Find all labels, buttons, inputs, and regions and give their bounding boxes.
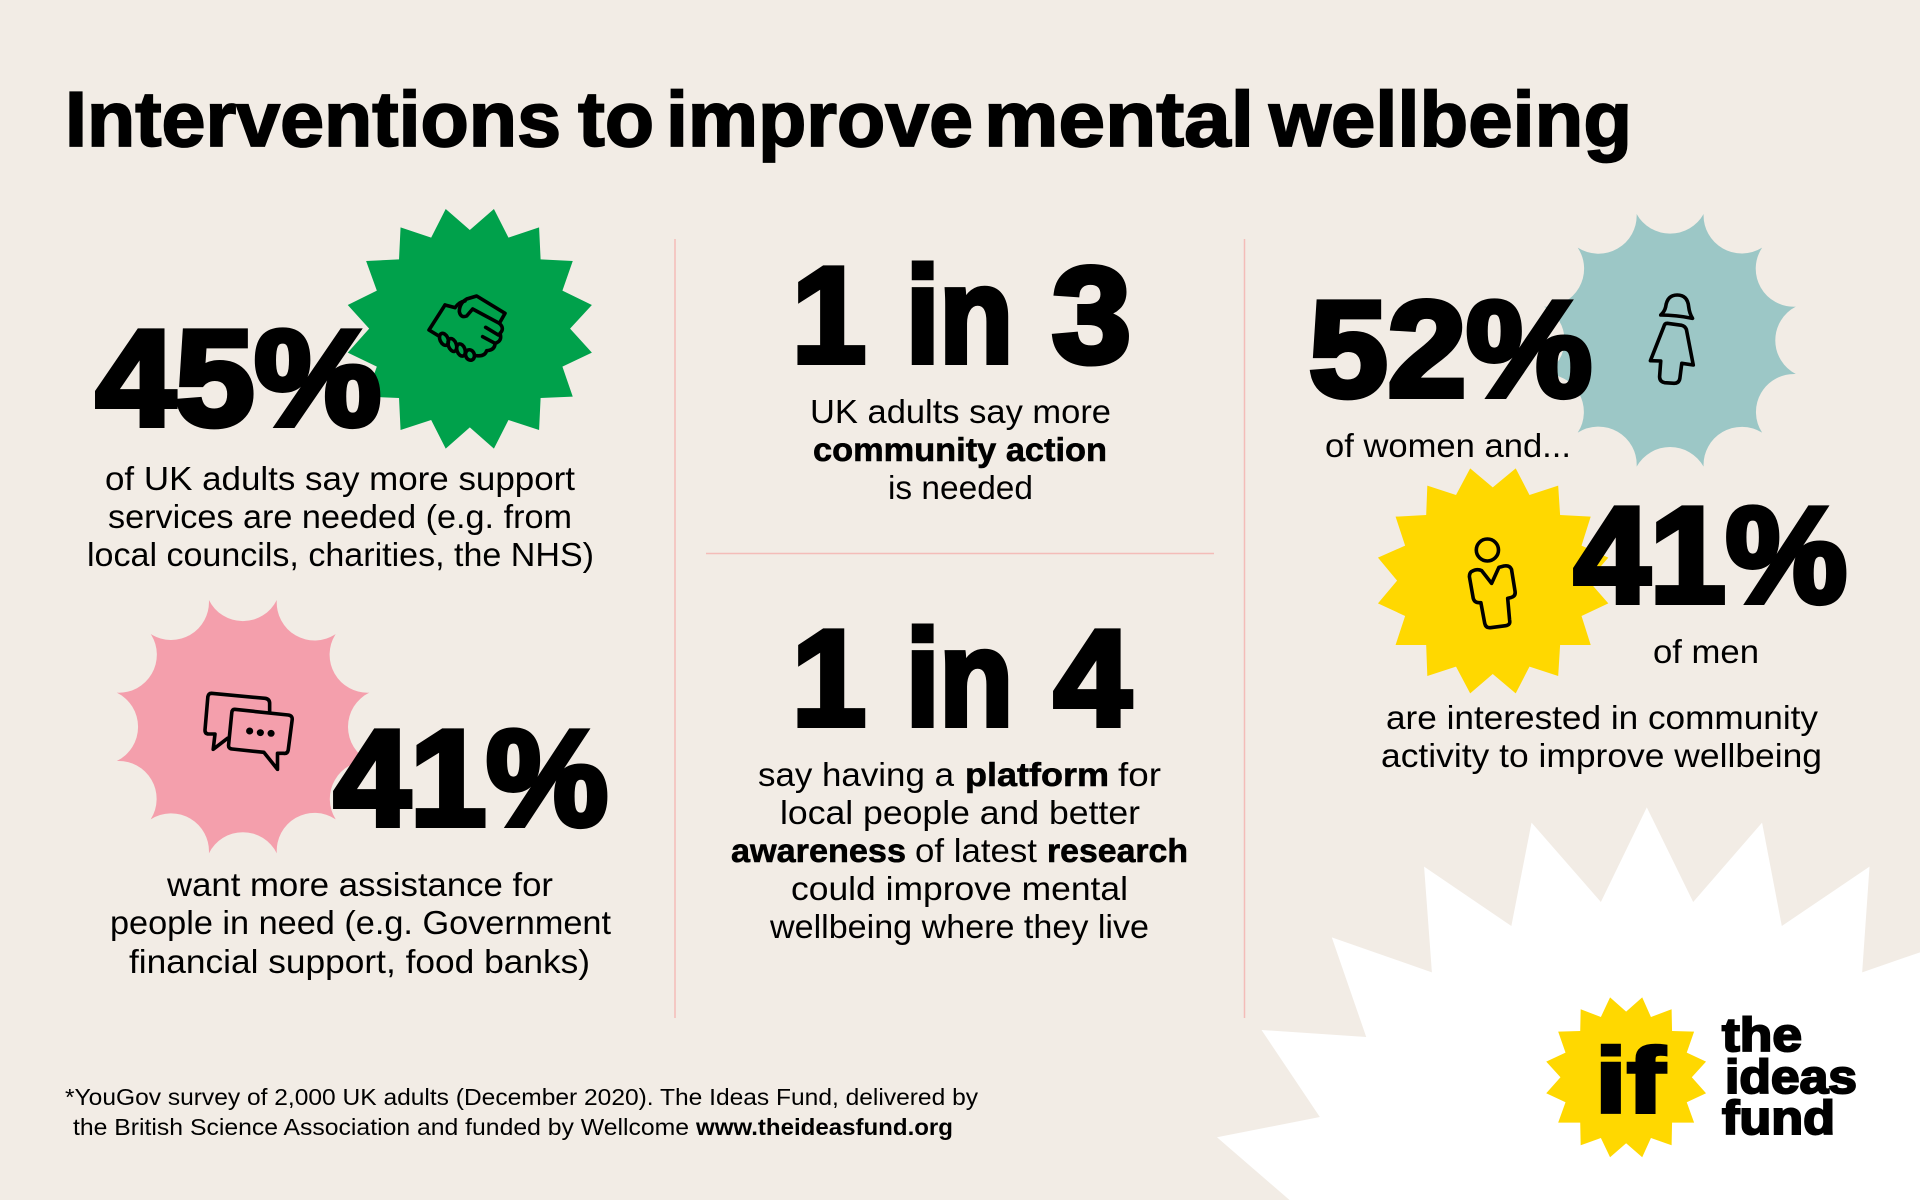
logo mark: if: if	[1595, 1030, 1665, 1132]
logo: the ideas fund	[1546, 997, 1857, 1157]
text: platform and research description: wellbeing where they live	[769, 908, 1149, 945]
panel: women and men	[1309, 214, 1847, 774]
logo wordmark	[1722, 1008, 1857, 1144]
text: platform and research description: research	[1047, 832, 1188, 869]
logo wordmark: the	[1722, 1008, 1802, 1061]
text: support services description: local councils, charities, the NHS)	[87, 536, 594, 573]
stat: 52%: 52%	[1309, 273, 1592, 425]
stat: 1 in 3: in	[906, 239, 1013, 391]
stat: 45%: 45%	[96, 302, 381, 454]
text: assistance description: want more assistance for	[166, 866, 553, 903]
logo wordmark: fund	[1722, 1091, 1835, 1144]
panel: 45% support services	[87, 209, 594, 573]
footnote: the British Science Association and funded by Wellcome	[73, 1114, 689, 1140]
text: platform and research description	[731, 756, 1188, 945]
title: wellbeing	[1268, 75, 1632, 163]
footnote: www.theideasfund.org	[695, 1114, 953, 1140]
footnote: *YouGov survey of 2,000 UK adults (December 2020). The Ideas Fund, delivered by	[65, 1084, 979, 1110]
text: community activity description: are interested in community	[1386, 699, 1819, 736]
text: support services description: of UK adults say more support	[105, 460, 575, 497]
text: platform and research description: awareness	[731, 832, 906, 869]
panel: 1 in 4	[731, 602, 1188, 945]
column dividers	[675, 239, 1244, 1018]
text: community activity description: activity to improve wellbeing	[1381, 737, 1822, 774]
text: community action description: UK adults say more	[810, 393, 1111, 430]
text: assistance description: people in need (e.g. Government	[110, 904, 611, 941]
icon: yellow logo starburst	[1546, 997, 1706, 1157]
stat: 1 in 4: in	[906, 602, 1013, 754]
stat: 1 in 3	[792, 239, 1131, 391]
panel: 41% assistance	[110, 600, 611, 980]
text: assistance description	[110, 866, 611, 980]
icon: green starburst with handshake	[348, 209, 592, 449]
logo wordmark: ideas	[1725, 1050, 1857, 1103]
text: community action description: community action	[813, 431, 1107, 468]
text: support services description	[87, 460, 594, 573]
text: of women and: of women and...	[1325, 427, 1571, 464]
stat: 41% of men: 41%	[1574, 479, 1847, 631]
stat: 1 in 4: 1	[792, 602, 866, 754]
title: Interventions	[65, 75, 561, 163]
text: platform and research description: could improve mental	[791, 870, 1128, 907]
stat: 1 in 4	[792, 602, 1131, 754]
text: support services description: services are needed (e.g. from	[108, 498, 572, 535]
title: mental	[984, 75, 1254, 163]
text: platform and research description: local people and better	[780, 794, 1140, 831]
title: to	[578, 75, 654, 163]
icon: yellow starburst with man	[1378, 468, 1608, 693]
title	[65, 75, 1632, 163]
text: platform and research description: say having a	[758, 756, 955, 793]
footnote	[65, 1084, 979, 1140]
text: community action description	[810, 393, 1111, 506]
text: platform and research description: of latest	[915, 832, 1037, 869]
icon: pink starburst with chat bubbles	[117, 600, 369, 853]
stat: 1 in 4: 4	[1054, 602, 1131, 754]
text: platform and research description: for	[1118, 756, 1161, 793]
stat: 1 in 3: 3	[1052, 239, 1131, 391]
stat: 41%: 41%	[334, 702, 608, 854]
text: assistance description: financial support, food banks)	[129, 943, 590, 980]
stat: 1 in 3: 1	[792, 239, 866, 391]
text: community action description: is needed	[888, 469, 1033, 506]
white starburst background	[1217, 807, 1920, 1200]
icon: teal starburst with woman	[1544, 214, 1796, 467]
text: of men: of men	[1653, 633, 1759, 670]
title: improve	[666, 75, 973, 163]
text: platform and research description: platform	[965, 756, 1109, 793]
panel: 1 in 3	[792, 239, 1131, 506]
text: community activity description	[1381, 699, 1822, 774]
